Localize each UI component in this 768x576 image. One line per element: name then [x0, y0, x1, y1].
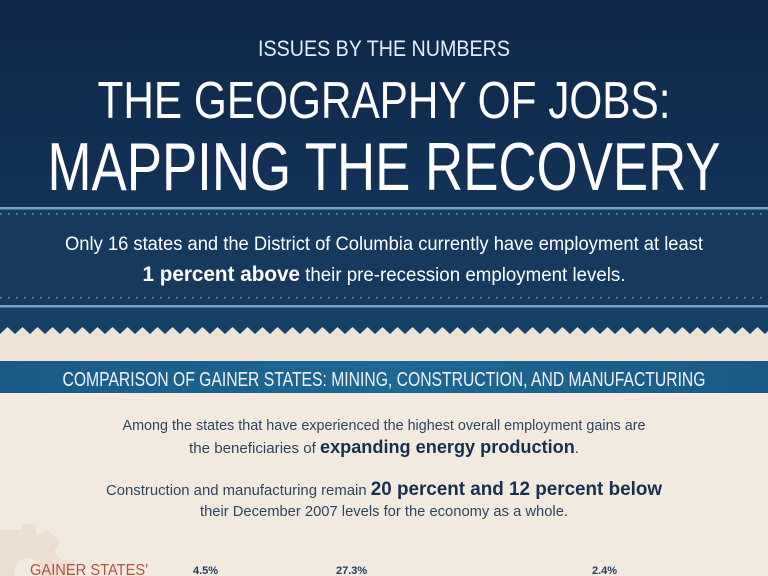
percentage labels: [193, 565, 617, 576]
paragraph: construction and manufacturing: their December 2007 levels for the economy as a whole.: [200, 503, 568, 520]
cream zigzag band: [0, 327, 768, 361]
paragraph: energy production: [122, 417, 646, 457]
section heading bar: [0, 361, 768, 393]
header background: [0, 0, 768, 340]
paragraph: energy production: Among the states that have experienced the highest overall employment gains are: [122, 417, 646, 434]
mid panel background: [0, 210, 768, 306]
paragraph: construction and manufacturing: [106, 479, 662, 520]
paragraph: energy production: the beneficiaries of expanding energy production.: [189, 437, 579, 457]
intro statement: [65, 234, 704, 286]
supertitle: ISSUES BY THE NUMBERS: [258, 36, 510, 61]
gear icon: [0, 524, 74, 576]
paragraph: construction and manufacturing: Construction and manufacturing remain 20 percent and 12 percent below: [106, 479, 662, 500]
intro statement: 1 percent above their pre-recession employment levels.: [142, 263, 626, 286]
intro statement: Only 16 states and the District of Columbia currently have employment at least: [65, 234, 704, 255]
